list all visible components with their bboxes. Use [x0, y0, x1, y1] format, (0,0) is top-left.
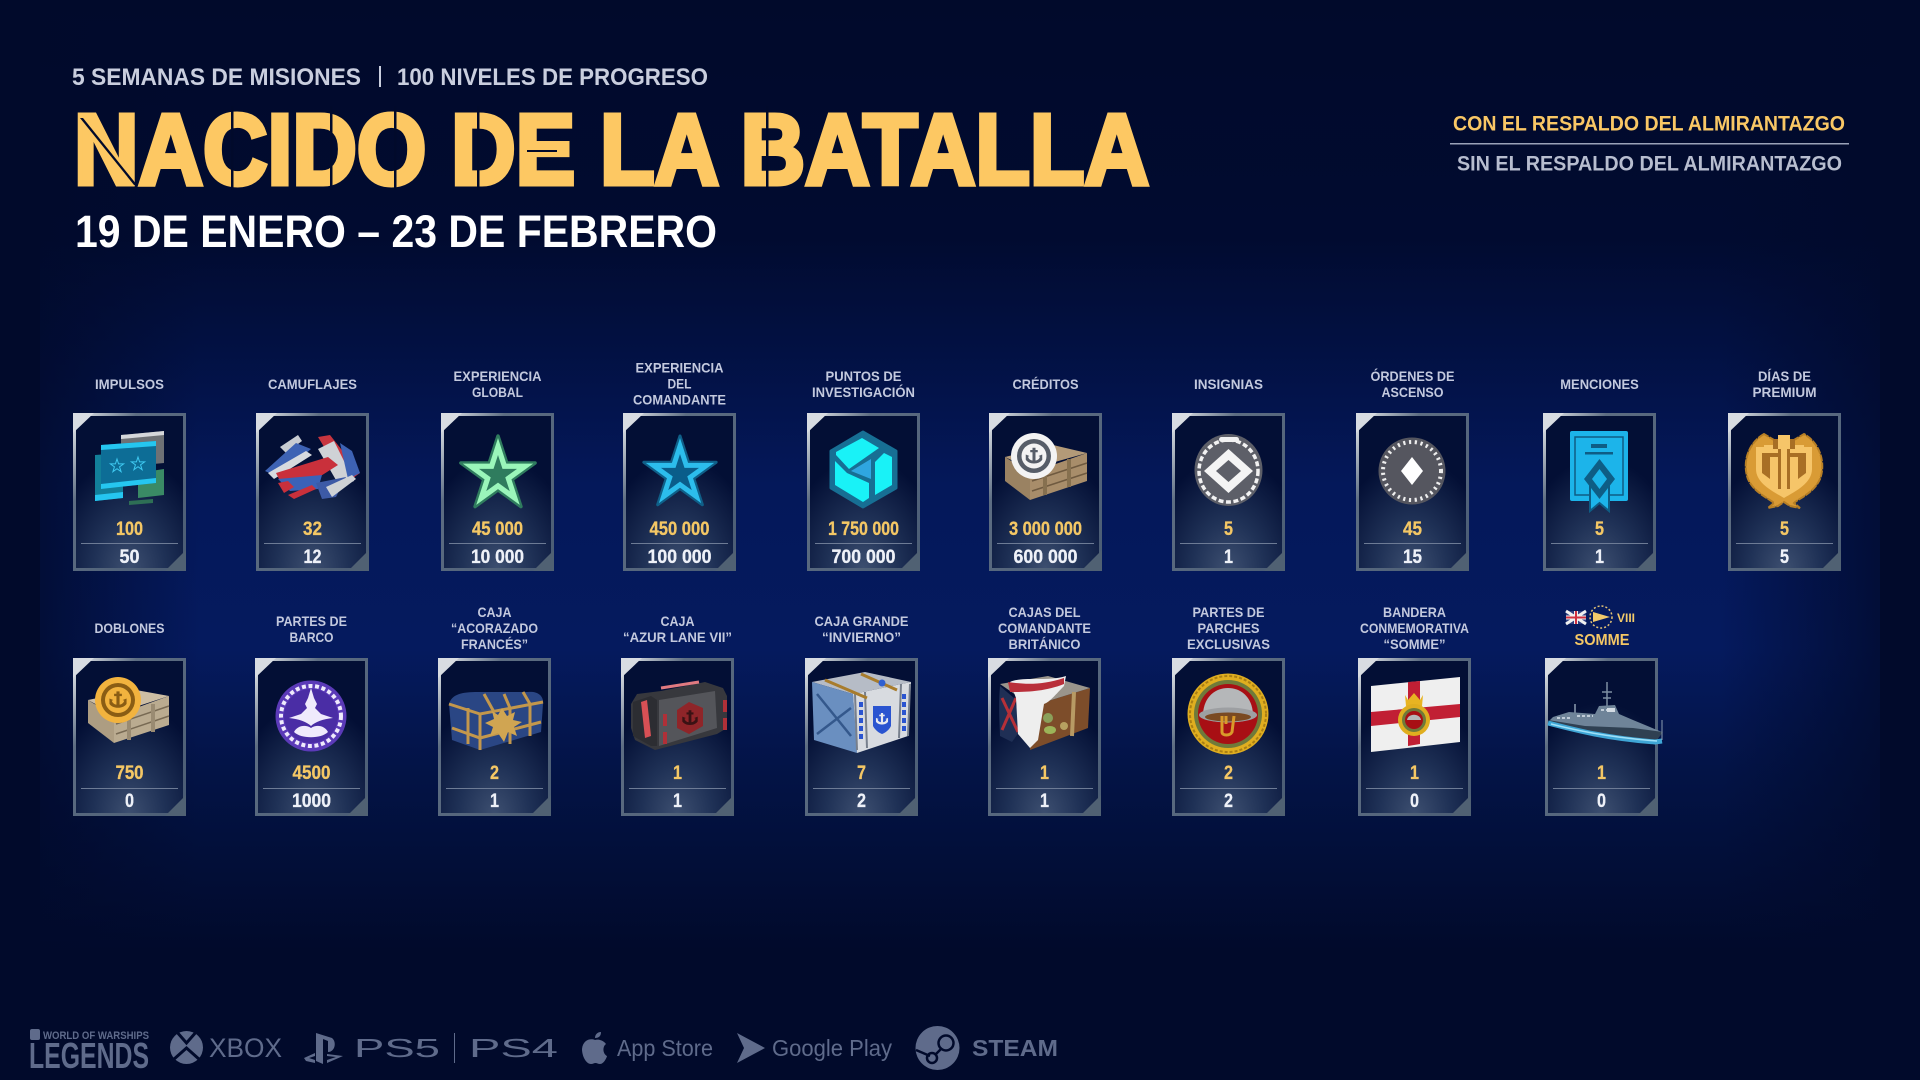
title: NACIDO DE LA BATALLA [74, 94, 1149, 206]
card: ordenes de ascenso: ÓRDENES DE [1370, 367, 1454, 384]
card: caja azur lane vii: 1 [673, 763, 682, 784]
card: partes de parches exclusivas: 2 [1224, 763, 1233, 784]
card: camuflajes: CAMUFLAJES [268, 376, 357, 392]
icon: cyan hexagon [831, 432, 896, 507]
card: impulsos: 100 [116, 519, 143, 540]
card: camuflajes: 32 [303, 519, 322, 540]
card: bandera conmemorativa somme: “SOMME” [1384, 636, 1446, 652]
card: partes de barco: BARCO [290, 629, 334, 645]
card: insignias: 5 [1224, 519, 1233, 540]
card: partes de barco: 1000 [292, 791, 331, 812]
card: bandera conmemorativa somme: CONMEMORATIVA [1360, 620, 1469, 636]
card: puntos de investigacion: 700 000 [832, 547, 896, 568]
card: cajas del comandante britanico [988, 604, 1101, 816]
card: menciones: 1 [1595, 547, 1604, 568]
card: dias de premium: 5 [1780, 519, 1789, 540]
card: caja acorazado frances: CAJA [478, 604, 512, 620]
card: menciones [1543, 376, 1656, 571]
card: dias de premium: DÍAS DE [1758, 368, 1811, 384]
logo: steam: STEAM [972, 1035, 1058, 1061]
card: bandera conmemorativa somme [1358, 604, 1471, 816]
card: experiencia global: GLOBAL [472, 384, 523, 400]
card: experiencia global: EXPERIENCIA [454, 368, 542, 384]
card: impulsos: IMPULSOS [95, 376, 164, 392]
card: caja grande invierno: 2 [857, 791, 866, 812]
icon: azur lane case [631, 682, 727, 750]
icon: crate with silver coin [1005, 433, 1087, 500]
icon: signal flags [95, 431, 164, 505]
card: partes de barco [255, 613, 368, 816]
card: caja grande invierno: “INVIERNO” [822, 629, 901, 645]
icon: winter crate [812, 672, 911, 753]
card: partes de parches exclusivas [1172, 604, 1285, 816]
logo: google play: Google Play [772, 1035, 892, 1061]
logo: xbox: XBOX [209, 1033, 282, 1063]
card: cajas del comandante britanico: COMANDANTE [998, 620, 1091, 636]
logo: world of warships legends: LEGENDS [29, 1035, 149, 1076]
card: puntos de investigacion: 1 750 000 [828, 519, 899, 540]
card: camuflajes: 12 [304, 547, 322, 568]
card: caja acorazado frances [438, 604, 551, 816]
logo: world of warships legends [29, 1029, 149, 1076]
card: bandera conmemorativa somme: 0 [1410, 791, 1419, 812]
card: experiencia del comandante: DEL [668, 376, 692, 392]
icon: blue star [644, 436, 716, 505]
subtitle: missions and levels [72, 64, 708, 91]
dates: 19 DE ENERO – 23 DE FEBRERO [75, 206, 717, 257]
icon: destroyer ship [1548, 682, 1663, 742]
card: doblones: 0 [125, 791, 134, 812]
icon: crate with gold coin [88, 677, 169, 743]
subtitle: missions and levels: 100 NIVELES DE PROGRESO [397, 64, 708, 91]
logo: playstation 5 and 4: PS4 [469, 1033, 558, 1063]
logo: app store [582, 1032, 713, 1064]
card: experiencia global: 45 000 [472, 519, 523, 540]
card: menciones: MENCIONES [1560, 376, 1639, 392]
icon: commemorative flag [1371, 677, 1460, 752]
card: ordenes de ascenso: ASCENSO [1382, 384, 1444, 400]
logo: playstation 5 and 4 [304, 1033, 558, 1064]
card: camuflajes [256, 376, 369, 571]
card: puntos de investigacion: INVESTIGACIÓN [812, 383, 915, 400]
card: ordenes de ascenso: 45 [1403, 519, 1422, 540]
card: experiencia global [441, 368, 554, 571]
card: somme ship: 1 [1597, 763, 1606, 784]
icon: helmet patch [1188, 674, 1268, 754]
card: ordenes de ascenso: 15 [1403, 547, 1422, 568]
legend: reward tracks: SIN EL RESPALDO DEL ALMIRANTAZGO [1457, 152, 1842, 176]
card: experiencia del comandante: EXPERIENCIA [636, 360, 724, 376]
icon: french chest [449, 692, 543, 750]
card: somme ship: SOMME [1574, 632, 1630, 649]
card: dias de premium [1728, 368, 1841, 571]
card: creditos: CRÉDITOS [1012, 376, 1078, 392]
card: doblones: 750 [116, 763, 144, 784]
card: caja acorazado frances: 2 [490, 763, 499, 784]
card: doblones: DOBLONES [94, 620, 164, 636]
card: experiencia del comandante: 100 000 [648, 547, 712, 568]
card: bandera conmemorativa somme: 1 [1410, 763, 1419, 784]
card: caja acorazado frances: FRANCÉS” [461, 636, 528, 652]
logo: app store: App Store [617, 1035, 713, 1061]
footer platform logos [29, 1026, 1058, 1076]
card: caja azur lane vii: 1 [673, 791, 682, 812]
card: puntos de investigacion [807, 368, 920, 571]
card: cajas del comandante britanico: 1 [1040, 791, 1049, 812]
card: partes de barco: 4500 [292, 763, 330, 784]
icon: gold premium badge [1746, 434, 1822, 508]
card: menciones: 5 [1595, 519, 1604, 540]
icon: green star [461, 436, 535, 507]
card: caja azur lane vii: “AZUR LANE VII” [623, 629, 732, 645]
card: doblones [73, 620, 186, 816]
logo: xbox [170, 1031, 282, 1064]
card: cajas del comandante britanico: BRITÁNICO [1008, 636, 1081, 652]
card: caja acorazado frances: 1 [490, 791, 499, 812]
card: experiencia del comandante [623, 360, 736, 571]
card: cajas del comandante britanico: CAJAS DEL [1008, 604, 1081, 620]
card: experiencia del comandante: 450 000 [650, 519, 710, 540]
card: insignias: 1 [1224, 547, 1233, 568]
icon: promotion order [1378, 438, 1446, 504]
legend: reward tracks [1450, 112, 1849, 176]
icon: blue certificate [1570, 431, 1628, 511]
ship nation and tier: VIII [1617, 611, 1635, 625]
ship nation and tier [1566, 606, 1635, 628]
legend: reward tracks: CON EL RESPALDO DEL ALMIRANTAZGO [1453, 112, 1845, 136]
card: somme ship: 0 [1597, 791, 1606, 812]
logo: playstation 5 and 4: PS5 [354, 1033, 440, 1063]
card: caja azur lane vii: CAJA [660, 613, 694, 629]
logo: google play [737, 1033, 892, 1063]
card: creditos: 3 000 000 [1009, 519, 1082, 540]
card: creditos: 600 000 [1014, 547, 1078, 568]
card: partes de parches exclusivas: PARCHES [1198, 620, 1260, 636]
card: impulsos: 50 [120, 547, 140, 568]
icon: british commander chest [999, 676, 1090, 750]
card: dias de premium: 5 [1780, 547, 1789, 568]
card: cajas del comandante britanico: 1 [1040, 763, 1049, 784]
card: creditos [989, 376, 1102, 571]
card: caja acorazado frances: “ACORAZADO [451, 620, 538, 636]
card: caja azur lane vii [621, 613, 734, 816]
card: dias de premium: PREMIUM [1752, 384, 1816, 400]
card: partes de parches exclusivas: 2 [1224, 791, 1233, 812]
logo: world of warships legends: WORLD OF WARSHIPS [43, 1030, 149, 1042]
card: impulsos [73, 376, 186, 571]
card: ordenes de ascenso [1356, 367, 1469, 571]
card: puntos de investigacion: PUNTOS DE [826, 368, 902, 384]
card: partes de parches exclusivas: EXCLUSIVAS [1187, 636, 1270, 652]
card: experiencia del comandante: COMANDANTE [633, 392, 726, 408]
card: insignias [1172, 376, 1285, 571]
icon: ship parts medallion [276, 680, 346, 752]
subtitle: missions and levels: 5 SEMANAS DE MISIONES [72, 64, 361, 91]
icon: camouflage patches [265, 435, 360, 499]
card: partes de parches exclusivas: PARTES DE [1192, 604, 1264, 620]
icon: silver insignia [1194, 434, 1262, 506]
card: insignias: INSIGNIAS [1194, 376, 1263, 392]
card: bandera conmemorativa somme: BANDERA [1383, 604, 1446, 620]
card: caja grande invierno [805, 613, 918, 816]
card: caja grande invierno: CAJA GRANDE [814, 613, 908, 629]
card: experiencia global: 10 000 [471, 547, 524, 568]
card: partes de barco: PARTES DE [276, 613, 347, 629]
logo: steam [916, 1026, 1058, 1070]
card: caja grande invierno: 7 [857, 763, 866, 784]
card: somme ship [1545, 606, 1663, 816]
